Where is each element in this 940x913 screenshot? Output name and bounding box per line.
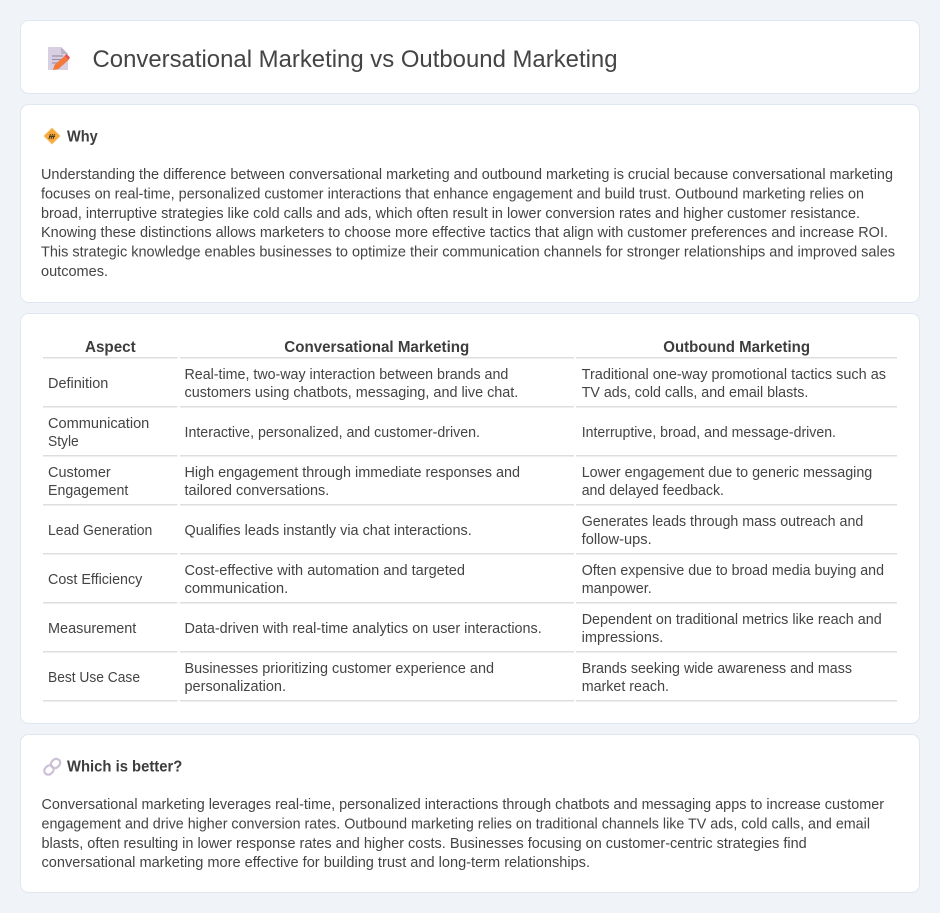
row: lead generation: follow-ups. xyxy=(582,532,652,548)
row: customer engagement: and delayed feedback. xyxy=(582,483,724,499)
text block: which is better xyxy=(42,797,884,871)
title: Conversational Marketing vs Outbound Marketing xyxy=(92,46,618,73)
row: lead generation: Lead Generation xyxy=(48,523,152,539)
row: lead generation xyxy=(48,514,863,548)
row: cost efficiency: Cost-effective with automation and targeted xyxy=(184,563,465,579)
row: definition: Definition xyxy=(48,376,108,392)
row: best use case xyxy=(48,661,852,695)
text block: which is better: conversational marketing more effective for building trust and long-term relationships. xyxy=(42,855,590,871)
text block: why: outcomes. xyxy=(41,264,108,280)
row: measurement: impressions. xyxy=(582,630,663,646)
panel: why xyxy=(20,104,920,302)
text block: which is better: engagement and drive higher conversion rates. Outbound marketing relies on traditional channels like TV ads, cold calls, and email xyxy=(42,816,870,832)
row: best use case: Brands seeking wide awareness and mass xyxy=(582,661,852,677)
row: cost efficiency xyxy=(48,563,884,597)
text block: which is better: blasts, often resulting in lower response rates and higher costs. Businesses focusing on customer-centric strategies find xyxy=(42,836,807,852)
row: communication style xyxy=(48,416,836,450)
row: customer engagement: High engagement through immediate responses and xyxy=(184,465,520,481)
row: definition: TV ads, cold calls, and email blasts. xyxy=(582,385,808,401)
text block: why: broad, interruptive strategies like cold calls and ads, which often result in lower conversion rates and higher customer resistance. xyxy=(41,206,860,222)
row: lead generation: Qualifies leads instantly via chat interactions. xyxy=(184,523,472,539)
row: definition: Real-time, two-way interaction between brands and xyxy=(184,367,508,383)
row: definition: customers using chatbots, messaging, and live chat. xyxy=(184,385,518,401)
heading: why: Why xyxy=(67,128,98,146)
row: measurement: Measurement xyxy=(48,621,136,637)
row: best use case: Best Use Case xyxy=(48,670,140,686)
table header row: Aspect xyxy=(85,339,136,356)
row: cost efficiency: manpower. xyxy=(582,581,652,597)
icon: orange diamond sign xyxy=(44,128,60,144)
row: measurement: Dependent on traditional metrics like reach and xyxy=(582,612,882,628)
panel: which is better xyxy=(20,734,920,892)
text block: why: focuses on real-time, personalized customer interactions that enhance engagement and build trust. Outbound marketing relies on xyxy=(41,186,864,202)
text block: why: Understanding the difference between conversational marketing and outbound marketing is crucial because conversational marketing xyxy=(41,167,893,183)
row: customer engagement xyxy=(48,465,872,499)
text block: why: This strategic knowledge enables businesses to optimize their communication channels for stronger relationships and improved sales xyxy=(41,245,895,261)
row: cost efficiency: communication. xyxy=(184,581,288,597)
row: customer engagement: tailored conversations. xyxy=(184,483,329,499)
table header row: Conversational Marketing xyxy=(284,339,469,356)
text block: why: Knowing these distinctions allows marketers to choose more effective tactics that align with customer preferences and increase ROI. xyxy=(41,225,888,241)
panel: comparison table xyxy=(20,314,920,724)
table header row: Outbound Marketing xyxy=(663,339,810,356)
text block: why xyxy=(41,167,895,280)
row: cost efficiency: Cost Efficiency xyxy=(48,572,143,588)
text block: which is better: Conversational marketing leverages real-time, personalized interactions through chatbots and messaging apps to increase customer xyxy=(42,797,884,813)
table header row xyxy=(85,339,810,356)
row: best use case: market reach. xyxy=(582,679,669,695)
heading: which is better: Which is better? xyxy=(67,758,182,776)
row: best use case: Businesses prioritizing customer experience and xyxy=(184,661,494,677)
row: customer engagement: Engagement xyxy=(48,483,128,499)
row: communication style: Style xyxy=(48,434,79,450)
row: measurement xyxy=(48,612,882,646)
row: communication style: Communication xyxy=(48,416,149,432)
row: definition: Traditional one-way promotional tactics such as xyxy=(582,367,886,383)
row: communication style: Interactive, personalized, and customer-driven. xyxy=(184,425,480,441)
row: customer engagement: Customer xyxy=(48,465,111,481)
row: measurement: Data-driven with real-time analytics on user interactions. xyxy=(184,621,542,637)
icon: memo with pencil xyxy=(48,47,70,70)
row: definition xyxy=(48,367,886,401)
row: customer engagement: Lower engagement due to generic messaging xyxy=(582,465,872,481)
row: communication style: Interruptive, broad, and message-driven. xyxy=(582,425,836,441)
row: best use case: personalization. xyxy=(184,679,286,695)
row: lead generation: Generates leads through mass outreach and xyxy=(582,514,863,530)
panel: header xyxy=(20,20,920,94)
icon: link xyxy=(43,757,62,776)
row: cost efficiency: Often expensive due to broad media buying and xyxy=(582,563,884,579)
